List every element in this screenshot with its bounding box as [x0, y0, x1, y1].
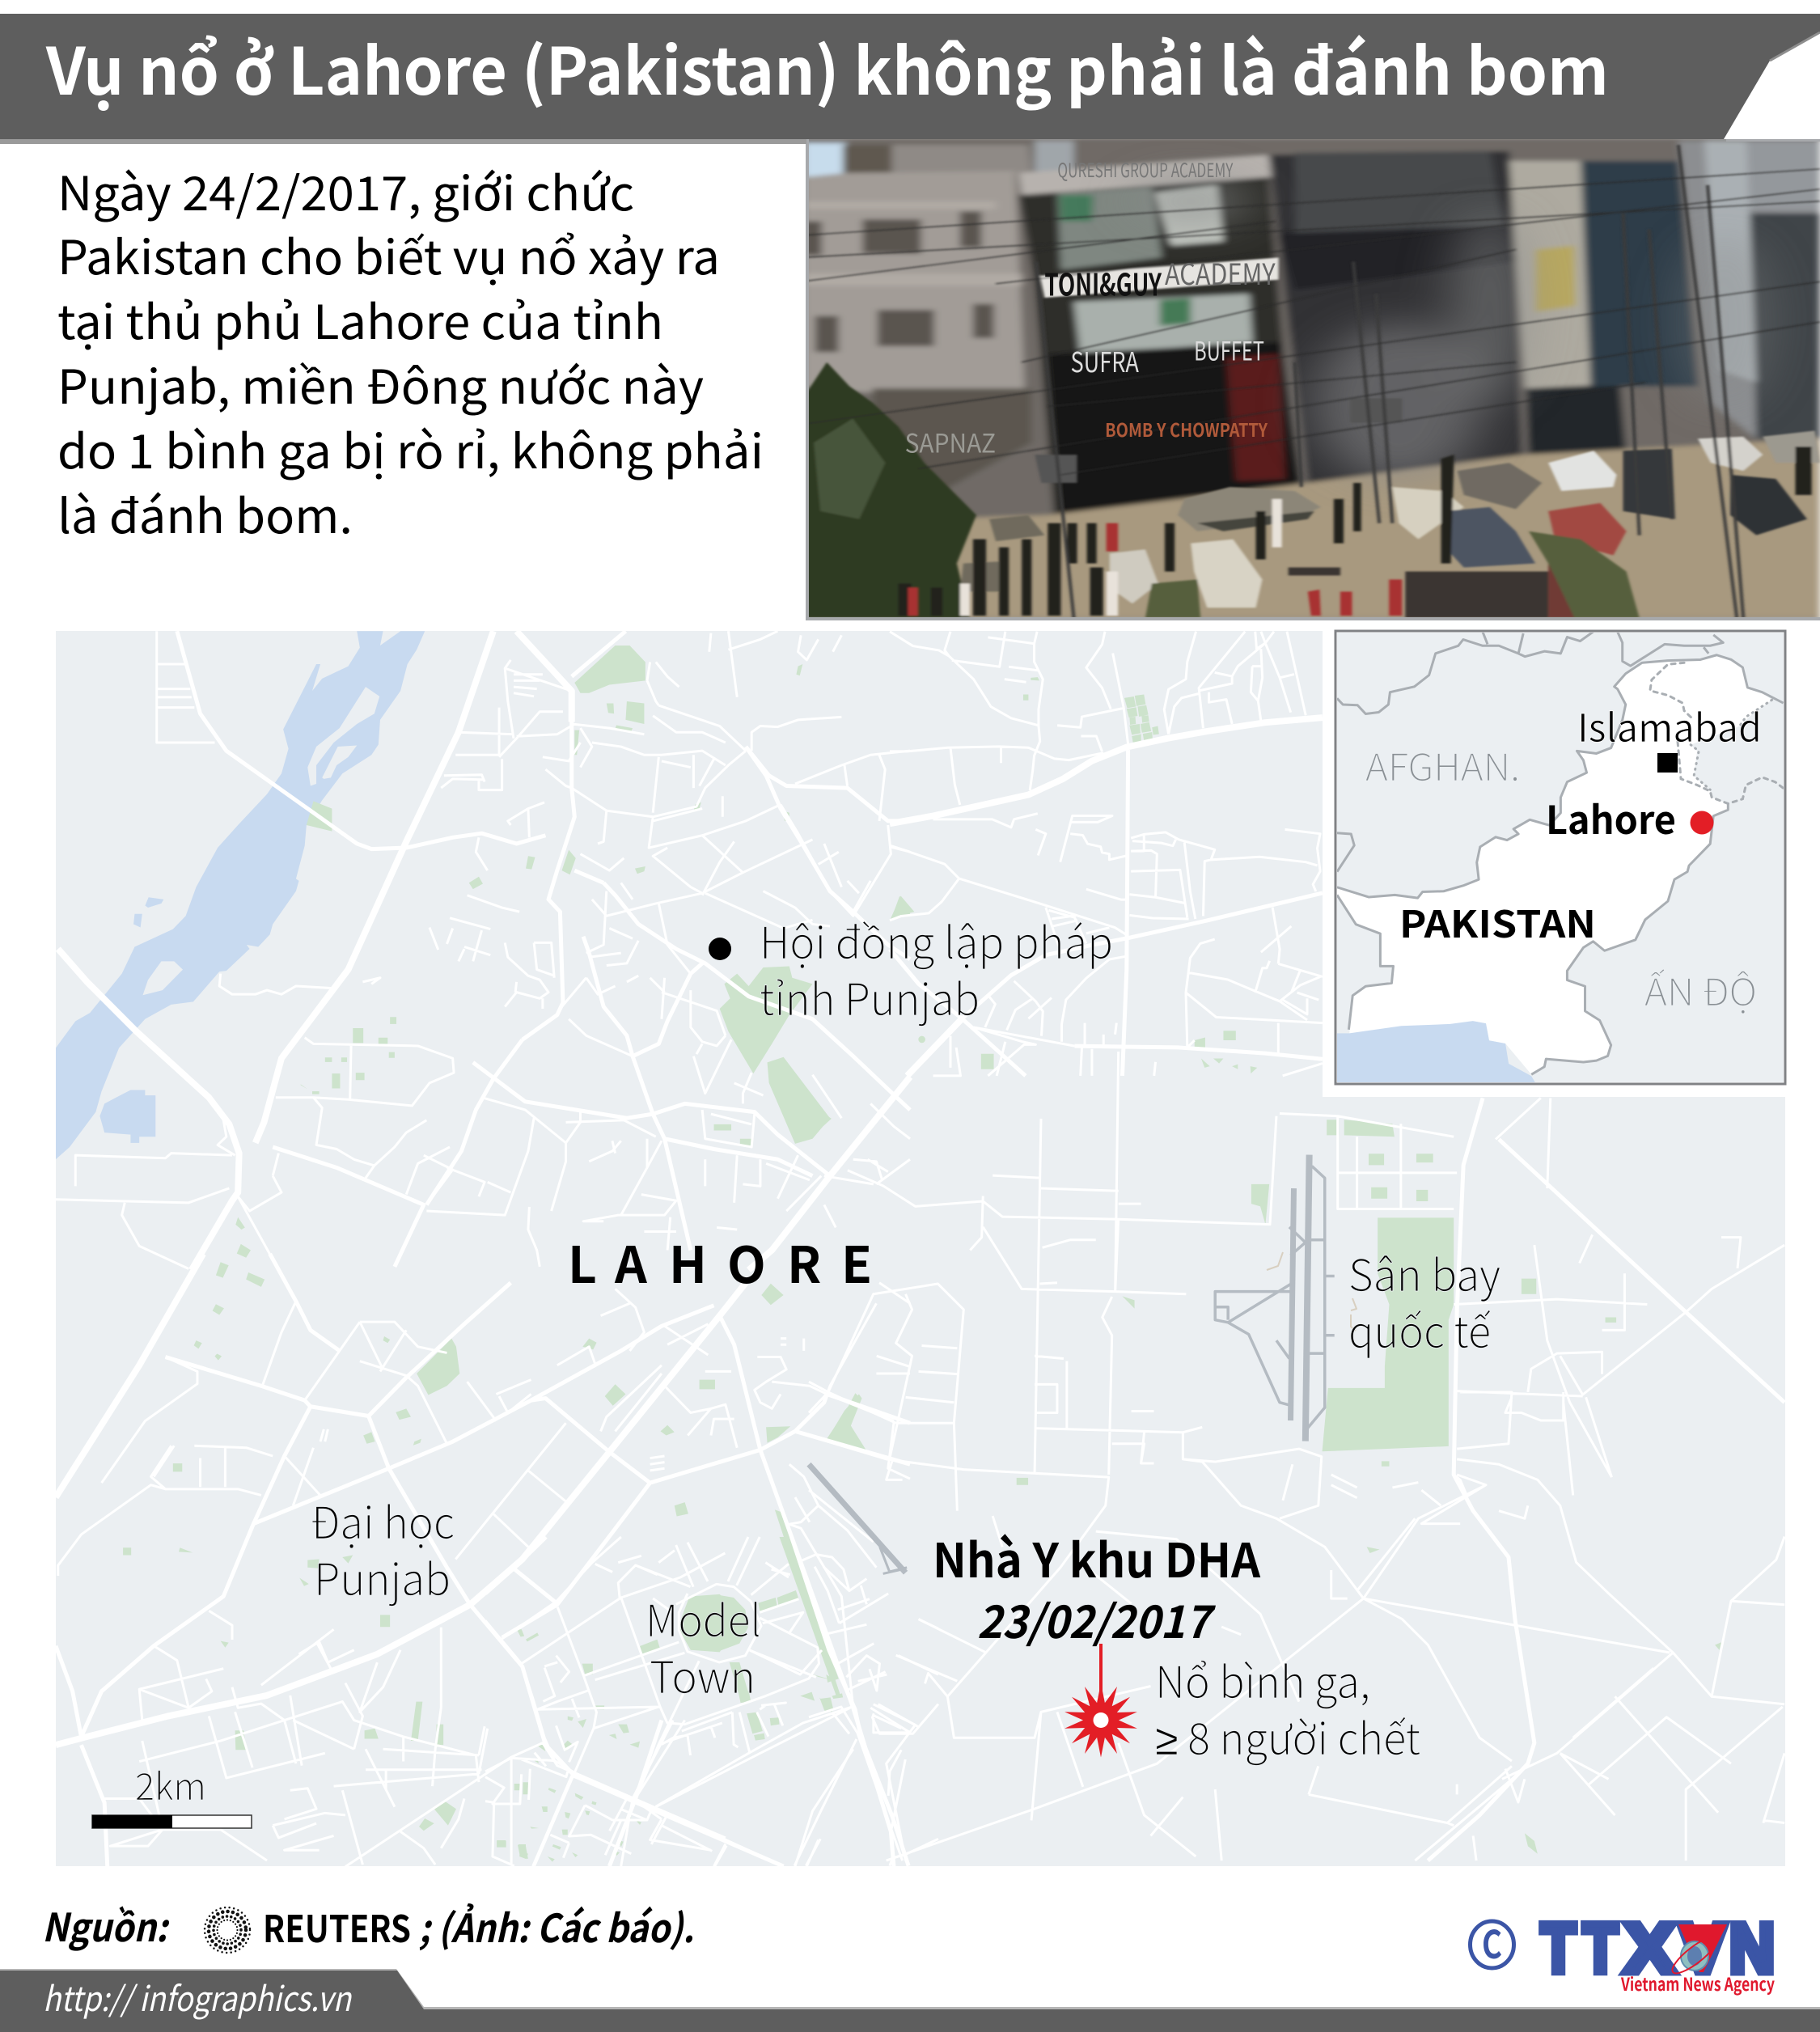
TTXVN wordmark: V: [1679, 1910, 1726, 1988]
intro text block: Punjab, miền Đông nước này: [57, 349, 704, 417]
TTXVN wordmark: T: [1541, 1910, 1576, 1988]
heading: Vụ nổ ở Lahore (Pakistan) không phải là đánh bom: [45, 20, 1609, 114]
title banner: [0, 14, 1820, 144]
website url: http:// infographics.vn: [43, 1972, 353, 2021]
label: Punjab provincial assembly: [760, 908, 1113, 1028]
source line: Nguồn:: [42, 1896, 170, 1953]
label: international airport: Sân bay: [1348, 1240, 1500, 1304]
source line: ; (Ảnh: Các báo).: [419, 1897, 694, 1954]
scale bar: 2km: [135, 1758, 206, 1811]
label: Punjab University: [311, 1488, 455, 1608]
label: Model Town: [645, 1585, 761, 1706]
label: Lahore: Lahore: [1546, 789, 1676, 845]
photo shop signs: [905, 155, 1276, 460]
intro text block: Pakistan cho biết vụ nổ xảy ra: [57, 220, 720, 288]
label: Punjab University: Đại học: [311, 1488, 455, 1552]
panel: inset locator map: [1323, 624, 1820, 1097]
parks and green areas: [123, 646, 1721, 1862]
photo shop signs: ACADEMY: [1165, 252, 1276, 294]
label: international airport: quốc tế: [1348, 1297, 1491, 1361]
photo shop signs: QURESHI GROUP ACADEMY: [1057, 155, 1234, 183]
intro text block: Ngày 24/2/2017, giới chức: [57, 156, 634, 224]
callout: blast site: Nổ bình ga,: [1155, 1647, 1370, 1711]
label: Punjab provincial assembly: tỉnh Punjab: [760, 964, 980, 1028]
photo shop signs: TONI&GUY: [1044, 260, 1162, 305]
country borders: [1337, 632, 1784, 1074]
agency name: Vietnam News Agency: [1620, 1971, 1775, 1996]
logo: copyright and TTXVN Vietnam News Agency: [1471, 1910, 1775, 1996]
panel: street map of Lahore: [56, 631, 1785, 1867]
scale bar: [92, 1758, 252, 1828]
callout: blast site: [933, 1523, 1420, 1767]
label: international airport: [1348, 1240, 1500, 1361]
Ravi river and water bodies: [56, 631, 425, 1159]
airport runways: [809, 1155, 1357, 1573]
icon: copyright mark: C: [1482, 1913, 1502, 1970]
icon: capital square marker: [1657, 753, 1678, 773]
callout: blast site: ≥ 8 người chết: [1155, 1704, 1420, 1767]
label: Punjab University: Punjab: [314, 1544, 451, 1608]
icon: Lahore red dot: [1691, 811, 1713, 835]
intro text block: tại thủ phủ Lahore của tỉnh: [57, 285, 663, 353]
source line: [42, 1896, 694, 1954]
photo shop signs: BUFFET: [1194, 331, 1264, 368]
icon: red V and globe: [1668, 1924, 1727, 1979]
icon: Reuters dot logo: [205, 1907, 250, 1953]
TTXVN wordmark: T: [1583, 1910, 1618, 1988]
photo shop signs: SUFRA: [1070, 341, 1139, 381]
label: Punjab provincial assembly: Hội đồng lập pháp: [760, 908, 1113, 972]
road network: [56, 631, 1784, 1867]
label: Islamabad: Islamabad: [1577, 696, 1762, 753]
label: Model Town: Model: [645, 1585, 761, 1649]
TTXVN wordmark: X: [1624, 1910, 1675, 1988]
label: AFGHAN.: AFGHAN.: [1365, 739, 1520, 792]
icon: assembly location dot: [709, 938, 731, 960]
photo shop signs: BOMB Y CHOWPATTY: [1105, 415, 1268, 442]
photo shop signs: SAPNAZ: [905, 423, 996, 460]
intro text block: do 1 bình ga bị rò rỉ, không phải: [57, 414, 764, 482]
callout: blast site: Nhà Y khu DHA: [933, 1523, 1261, 1591]
photo smoke haze: [1132, 173, 1769, 483]
icon: explosion marker: [1064, 1683, 1137, 1757]
label: Model Town: Town: [650, 1642, 756, 1706]
Pakistan landmass: [1337, 655, 1772, 1074]
source line: REUTERS: [263, 1900, 411, 1954]
photo frame: [807, 139, 1820, 619]
intro text block: [57, 156, 764, 547]
callout: blast site: 23/02/2017: [977, 1586, 1216, 1652]
Arabian Sea: [1337, 1021, 1536, 1085]
label: LAHORE: LAHORE: [568, 1225, 872, 1298]
icon: copyright mark: [1471, 1913, 1514, 1970]
label: PAKISTAN: PAKISTAN: [1399, 895, 1596, 949]
intro text block: là đánh bom.: [57, 479, 353, 547]
footer band: [0, 1969, 1820, 2032]
map labels: [92, 908, 1500, 1828]
TTXVN wordmark: [1541, 1910, 1775, 1988]
TTXVN wordmark: N: [1729, 1910, 1775, 1988]
label: ẤN ĐỘ: ẤN ĐỘ: [1644, 963, 1757, 1017]
photo: smoke-covered buildings after the blast: [801, 137, 1820, 620]
